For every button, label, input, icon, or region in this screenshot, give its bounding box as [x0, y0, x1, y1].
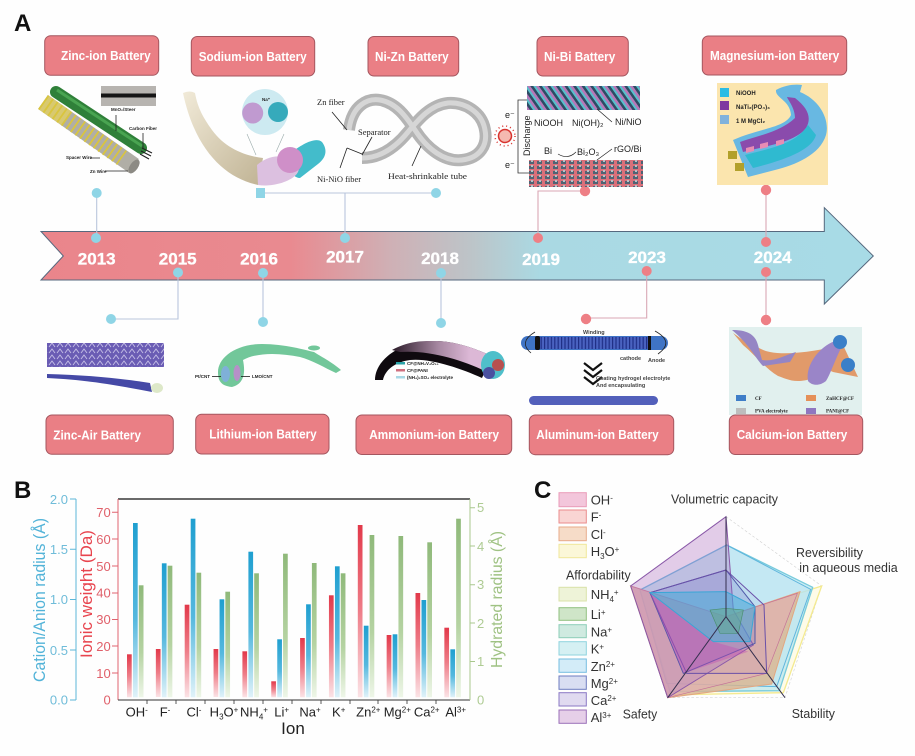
panel C: legend: 2+ — [609, 677, 618, 686]
x axis ion labels: + — [234, 706, 239, 714]
illustration: ammonium-ion fiber: (NH₄)₂SO₄ electrolyte — [407, 375, 454, 380]
panel C: legend: Na — [591, 624, 607, 640]
card: Calcium-ion Battery — [729, 415, 863, 454]
card: Zinc-Air Battery: Zinc-Air Battery — [53, 427, 142, 442]
radar outer grid — [631, 517, 822, 698]
x axis ion labels: 4 — [259, 712, 264, 722]
x axis ion labels: 2+ — [371, 706, 381, 714]
x axis ion labels: Zn — [356, 704, 371, 720]
panel C: legend: F — [591, 510, 599, 524]
radar axis labels: Safety — [623, 707, 658, 721]
illustration: Ni-Zn infinity fiber: Separator — [358, 127, 391, 137]
red bars: ionic weight — [127, 525, 449, 697]
x axis ion labels: Al — [445, 704, 457, 720]
card: Zinc-ion Battery — [45, 36, 159, 75]
left red axis labels: Ionic weight (Da) — [77, 530, 96, 658]
illustration: Ni-Bi battery — [495, 86, 643, 187]
illustration: Ni-Bi battery: Ni/NiO — [615, 117, 642, 127]
card: Sodium-ion Battery — [191, 36, 315, 76]
illustration: Ni-Bi battery: Ni(OH)₂ — [572, 118, 604, 128]
panel C: legend: OH — [591, 492, 610, 508]
x axis ion labels: + — [316, 706, 321, 714]
illustration: Ni-Zn infinity fiber — [317, 97, 486, 184]
x axis ion labels: K — [332, 704, 341, 720]
card: Ni-Bi Battery — [537, 36, 628, 76]
panel C: legend: Li — [591, 607, 601, 622]
radar axis labels: Volumetric capacity — [671, 493, 779, 507]
card: Lithium-ion Battery: Lithium-ion Battery — [209, 427, 317, 442]
illustration: calcium-ion fiber — [729, 327, 862, 415]
K+ polygon — [640, 545, 813, 692]
card: Zinc-ion Battery: Zinc-ion Battery — [61, 48, 151, 63]
Ca2+ polygon — [650, 570, 767, 673]
card: Ni-Bi Battery: Ni-Bi Battery — [544, 49, 616, 64]
card: Magnesium-ion Battery — [702, 36, 847, 75]
blue bars: cation/anion radius — [133, 519, 455, 697]
illustration: Ni-Bi battery: NiOOH — [534, 118, 563, 128]
illustration: Ni-Zn infinity fiber: Ni-NiO fiber — [317, 174, 361, 184]
left red axis labels: 70 — [96, 505, 111, 520]
right green axis labels: 2 — [477, 616, 484, 631]
left red axis labels: 60 — [96, 532, 111, 547]
illustration: Ni-Bi battery: Bi — [544, 146, 552, 156]
left red axis labels: 20 — [96, 639, 111, 654]
x axis ion labels: 2+ — [430, 706, 440, 714]
radar axis labels: Reversibility — [796, 546, 864, 560]
panel C: legend: NH — [591, 587, 609, 602]
magenta overlap region — [650, 593, 748, 673]
illustration: aluminum-ion fiber: cathode — [620, 356, 641, 362]
illustration: magnesium-ion fiber: 1 M MgCl₂ — [736, 119, 765, 125]
Al3+ polygon — [631, 517, 753, 698]
illustration: Ni-Bi battery: Bi₂O₃ — [577, 147, 599, 157]
panel C: legend: H — [591, 544, 600, 559]
x axis ion labels — [126, 704, 466, 722]
x axis title: Ion — [281, 719, 305, 738]
x axis ion labels: 2+ — [402, 706, 411, 714]
illustration: calcium-ion fiber: CF — [755, 397, 762, 402]
illustration: aluminum-ion fiber: And encapsulating — [596, 383, 645, 389]
radar axis labels: Stability — [792, 707, 836, 721]
x axis ion labels: OH — [126, 704, 145, 720]
left blue axis labels: 0.0 — [50, 692, 68, 708]
panel C: legend: 4 — [609, 595, 614, 604]
panel C: legend: 3 — [600, 552, 605, 561]
x axis ion labels: F — [160, 704, 168, 720]
panel label B: B — [14, 477, 31, 504]
left red axis labels — [77, 505, 111, 708]
right green axis labels: 5 — [477, 500, 484, 515]
illustration: zinc-air fiber — [47, 343, 164, 393]
panel C: legend: Zn — [591, 659, 606, 674]
illustration: Ni-Zn infinity fiber: Zn fiber — [317, 97, 345, 107]
year labels: 2016 — [240, 250, 278, 268]
Na+ polygon — [650, 592, 755, 642]
radar axis labels: in aqueous media — [799, 561, 898, 575]
x axis ion labels: Mg — [384, 704, 402, 720]
year labels: 2023 — [628, 248, 666, 267]
x axis ion labels: - — [168, 706, 171, 714]
illustration: sodium-ion fiber: Na⁺ — [262, 97, 271, 102]
illustration: calcium-ion fiber: ZnHCF@CF — [826, 397, 854, 402]
card: Calcium-ion Battery: Calcium-ion Battery — [737, 427, 848, 442]
illustration: zinc-ion fiber: Spacer Wire — [66, 155, 92, 160]
timeline arrow — [41, 208, 873, 304]
illustration: aluminum-ion fiber: Winding — [583, 330, 605, 336]
panel C: legend: + — [614, 588, 619, 597]
x axis ion labels: Li — [274, 704, 284, 720]
panel C: legend: 3+ — [602, 711, 612, 720]
Cl- polygon — [631, 586, 800, 698]
x axis ion labels: - — [145, 706, 148, 714]
x axis ion labels: NH — [240, 704, 259, 720]
timeline connectors and nodes — [91, 185, 771, 328]
right green axis labels: 0 — [477, 692, 484, 708]
illustration: magnesium-ion fiber — [717, 83, 828, 185]
illustration: ammonium-ion fiber: CF@PANI — [407, 368, 428, 373]
panel C: radar chart — [631, 517, 822, 698]
left red axis labels: 40 — [96, 586, 111, 600]
left blue axis labels: 1.0 — [50, 592, 68, 607]
panel C: legend: + — [615, 545, 620, 554]
x axis ion labels: 3+ — [457, 706, 466, 714]
left blue axis labels: 2.0 — [50, 492, 68, 507]
panel C: legend — [559, 492, 620, 725]
left blue axis labels: 1.5 — [50, 542, 68, 557]
illustration: calcium-ion fiber: PVA electrolyte — [755, 410, 789, 414]
right green axis labels: 4 — [477, 539, 484, 554]
year labels: 2017 — [326, 248, 364, 266]
x axis ion labels: - — [199, 706, 202, 714]
panel C: legend: Ca — [591, 693, 607, 708]
panel C: legend: Al — [591, 710, 602, 725]
x axis ion labels: Cl — [187, 704, 199, 720]
x axis ion labels: H — [210, 704, 219, 720]
right green axis labels: Hydrated radius (Å) — [487, 531, 506, 668]
illustration: zinc-ion fiber: Carbon Fiber — [129, 126, 157, 131]
panel C: legend: - — [603, 528, 606, 537]
illustration: lithium-ion fiber: LMO/CNT — [252, 374, 273, 379]
card: Ni-Zn Battery: Ni-Zn Battery — [375, 49, 449, 64]
left red axis labels: 10 — [96, 666, 111, 681]
panel C: legend: Mg — [591, 676, 609, 691]
illustration: Ni-Bi battery: Discharge — [522, 115, 532, 156]
card: Lithium-ion Battery — [196, 414, 329, 454]
x axis ion labels: 3 — [219, 712, 224, 722]
card: Aluminum-ion Battery: Aluminum-ion Battery — [536, 427, 659, 442]
OH- polygon — [631, 586, 797, 698]
illustration: Ni-Bi battery: e⁻ — [505, 110, 515, 120]
panel C: legend: K — [591, 642, 599, 656]
illustration: aluminum-ion fiber: Anode — [648, 358, 665, 364]
card: Ammonium-ion Battery: Ammonium-ion Battery — [369, 427, 500, 442]
left red axis labels: 0 — [103, 692, 111, 708]
radar axis labels — [566, 493, 898, 721]
illustration: magnesium-ion fiber: NaTi₂(PO₄)₃ — [736, 105, 770, 111]
radar spokes — [668, 517, 785, 698]
year labels: 2018 — [421, 249, 459, 268]
panel label A: A — [14, 10, 31, 37]
panel C: legend: 2+ — [607, 694, 617, 703]
right green axis labels — [477, 500, 506, 708]
left blue axis labels: Cation/Anion radius (Å) — [30, 518, 49, 682]
illustration: Ni-Zn infinity fiber: Heat-shrinkable tube — [388, 171, 467, 181]
card: Zinc-Air Battery — [46, 415, 173, 454]
x axis ion labels: + — [263, 706, 268, 714]
illustration: zinc-ion fiber — [43, 86, 157, 175]
panel C: legend: - — [610, 494, 613, 502]
left blue axis labels: 0.5 — [50, 643, 68, 658]
right green axis labels: 3 — [477, 577, 484, 592]
x axis ion labels: + — [284, 706, 289, 714]
H3O+ polygon — [631, 586, 822, 695]
right green axis labels: 1 — [477, 654, 484, 669]
illustration: ammonium-ion fiber — [375, 341, 505, 380]
panel C: legend: Cl — [591, 527, 603, 542]
illustration: calcium-ion fiber: PANI@CF — [826, 410, 849, 414]
year labels: 2024 — [754, 248, 792, 267]
illustration: sodium-ion fiber — [183, 89, 325, 186]
illustration: zinc-ion fiber: Zn Wire — [90, 169, 107, 174]
green bars: hydrated radius — [139, 519, 461, 697]
left blue axis labels — [30, 492, 68, 708]
panel C: legend: + — [601, 608, 606, 617]
Mg2+ polygon — [650, 570, 755, 673]
Li+ polygon — [710, 608, 743, 633]
left red axis labels: 30 — [96, 612, 111, 627]
year labels: 2015 — [159, 250, 197, 268]
illustration: ammonium-ion fiber: CF@NH₄V₄O₁₀ — [407, 361, 439, 366]
chart frame and axes — [70, 499, 475, 704]
x axis ion labels: Na — [299, 704, 316, 720]
illustration: lithium-ion fiber: Pt/CNT — [195, 374, 210, 379]
year labels: 2013 — [78, 250, 116, 268]
radar axis labels: Affordability — [566, 568, 631, 582]
card: Sodium-ion Battery: Sodium-ion Battery — [199, 49, 307, 64]
illustration: magnesium-ion fiber: NiOOH — [736, 91, 756, 97]
card: Ammonium-ion Battery — [356, 415, 512, 454]
panel C: legend: 2+ — [606, 660, 615, 669]
year labels — [78, 248, 792, 269]
panel B: ion property bar chart — [30, 492, 506, 738]
panel C: legend: O — [605, 544, 615, 559]
illustration: Ni-Bi battery: rGO/Bi — [614, 144, 642, 154]
illustration: aluminum-ion fiber: Coating hydrogel electrolyte — [596, 376, 670, 382]
card: Magnesium-ion Battery: Magnesium-ion Battery — [710, 48, 840, 63]
panel label C: C — [534, 477, 551, 504]
card: Ni-Zn Battery — [368, 36, 459, 76]
x axis ion labels: Ca — [414, 704, 430, 720]
card: Aluminum-ion Battery — [529, 415, 674, 455]
illustration: aluminum-ion fiber — [521, 330, 670, 405]
illustration: zinc-ion fiber: MnO₂/Steer — [111, 107, 136, 112]
x axis ion labels: O — [224, 704, 234, 720]
illustration: lithium-ion fiber — [195, 344, 341, 387]
left red axis labels: 50 — [96, 559, 111, 574]
panel C: legend: + — [607, 626, 612, 634]
illustration: Ni-Bi battery: e⁻ — [505, 160, 515, 170]
x axis ion labels: + — [341, 706, 346, 714]
panel C: legend: - — [599, 510, 602, 520]
Zn2+ polygon — [640, 545, 811, 687]
year labels: 2019 — [522, 250, 560, 269]
panel C: legend: + — [599, 642, 604, 652]
